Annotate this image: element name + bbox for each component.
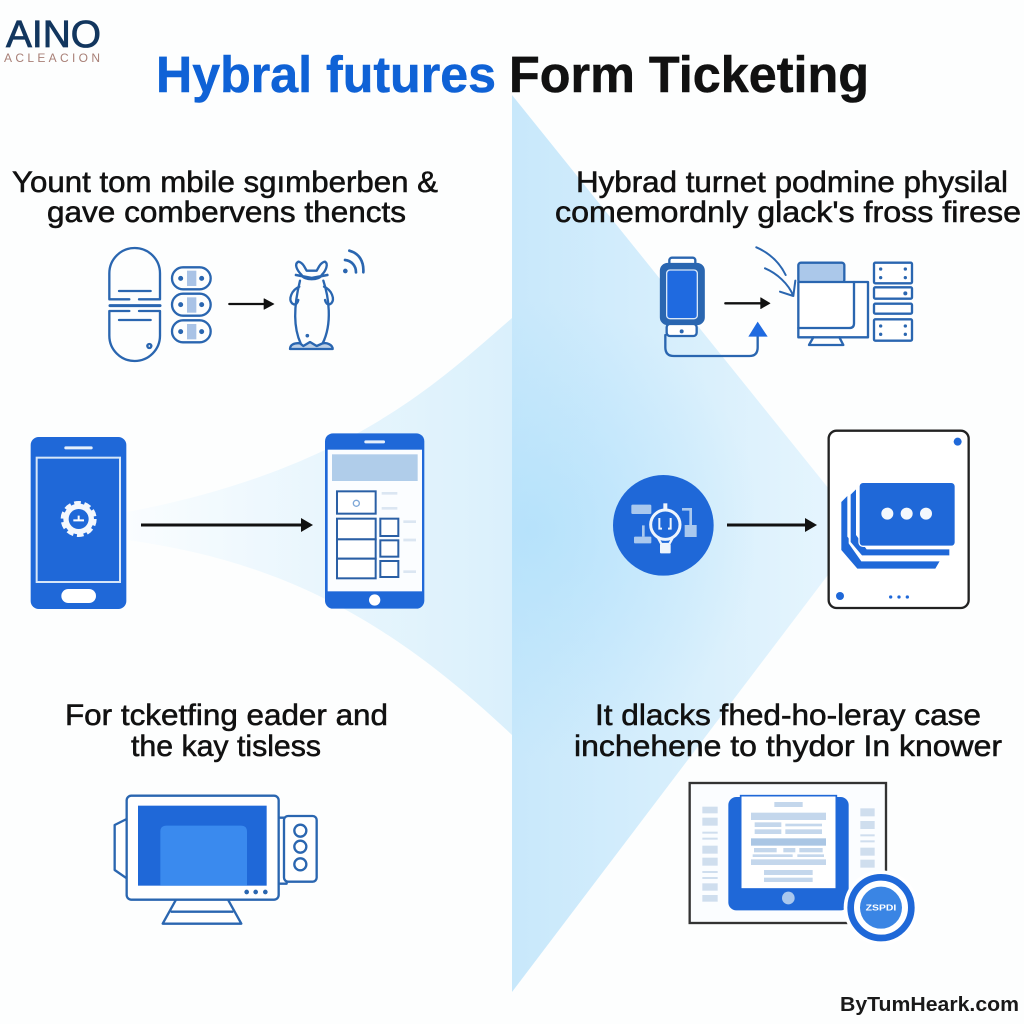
icon: lightbulb circle bbox=[613, 475, 714, 576]
background: right light triangle bbox=[512, 95, 862, 992]
footer credit: ByTumHeark.com bbox=[840, 994, 1019, 1016]
background: left light wedge bbox=[127, 318, 512, 735]
text block: top left: gave combervens thencts bbox=[47, 196, 406, 229]
text block: bottom left: For tcketfing eader and bbox=[65, 699, 388, 732]
text block: top right: comemordnly glack's fross firese bbox=[555, 196, 1021, 229]
icon: watch to computer and server racks bbox=[661, 247, 912, 356]
text block: top right: Hybrad turnet podmine physilal bbox=[576, 166, 1008, 199]
logo: AINO bbox=[6, 14, 101, 56]
arrow: lightbulb to card bbox=[727, 518, 817, 532]
title bbox=[156, 46, 869, 103]
icon: document tablet with badge: ZSPDI bbox=[866, 903, 896, 912]
text block: bottom right bbox=[574, 699, 1002, 763]
icon: document tablet with badge bbox=[690, 783, 918, 945]
icon: desktop monitor with side panel bbox=[115, 796, 317, 924]
text block: bottom right: inchehene to thydor In knower bbox=[574, 730, 1002, 763]
logo: ACLEACION bbox=[4, 51, 100, 65]
icon: phone with gear bbox=[31, 437, 126, 609]
icon: tablet with dashboard bbox=[325, 433, 424, 609]
text block: top left: Yount tom mbile sgımberben & bbox=[12, 166, 438, 199]
title: Hybral futures bbox=[156, 46, 496, 103]
icon: card stack with dots bbox=[829, 431, 969, 608]
text block: top right bbox=[555, 166, 1021, 229]
text block: bottom left bbox=[65, 699, 388, 763]
arrow: phone to tablet bbox=[141, 518, 313, 532]
text block: bottom right: It dlacks fhed-ho-leray case bbox=[595, 699, 981, 732]
title: Form Ticketing bbox=[509, 46, 869, 103]
text block: bottom left: the kay tisless bbox=[131, 730, 321, 763]
text block: top left bbox=[12, 166, 438, 229]
icon: capsule, pills and connected creature bbox=[109, 248, 363, 361]
